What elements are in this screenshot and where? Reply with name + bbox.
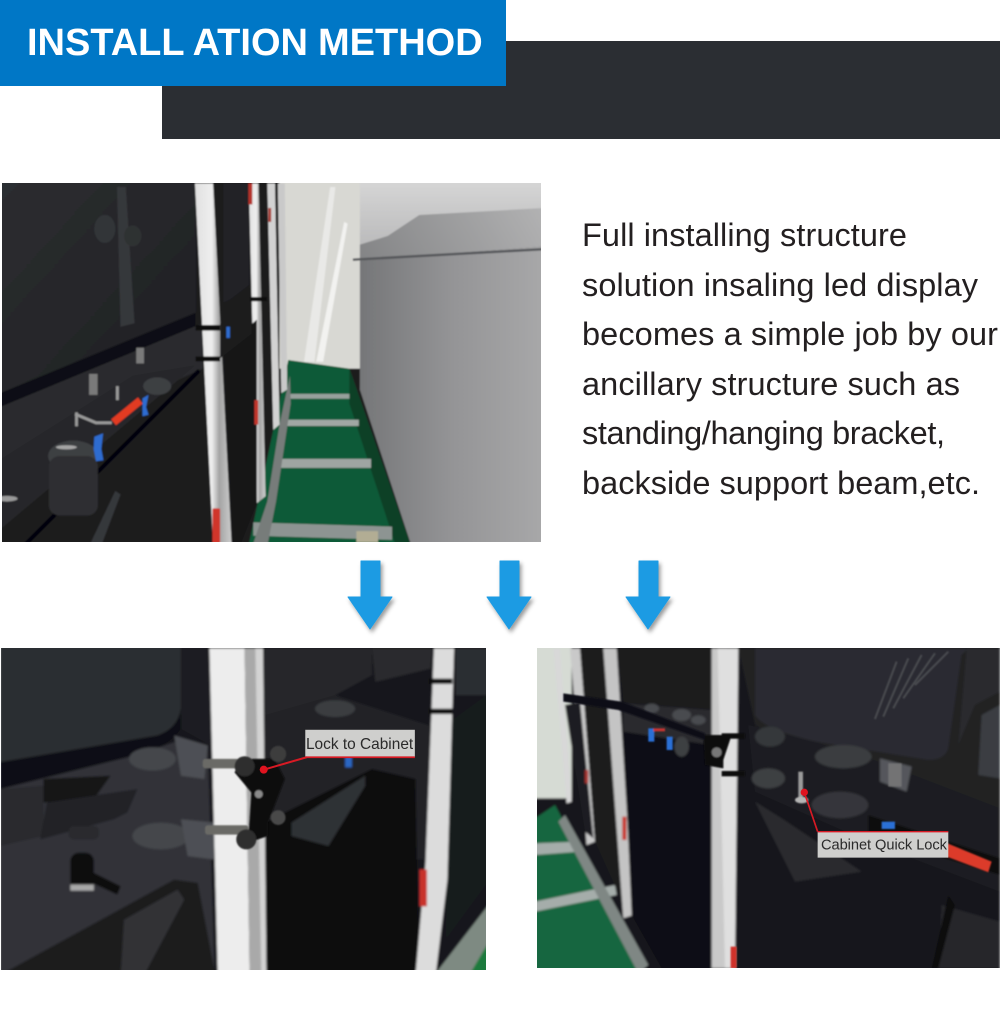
near upright — [712, 648, 735, 968]
title banner: INSTALL ATION METHOD — [27, 22, 483, 64]
photo: cabinet quick lock detail — [537, 648, 1000, 968]
far uprights — [553, 648, 572, 803]
callout: lock to cabinet: Lock to Cabinet — [306, 736, 414, 753]
photo: lock to cabinet detail — [1, 648, 486, 970]
lower left cabinet — [0, 880, 214, 975]
icon: arrow 3 — [626, 561, 670, 629]
mounting plate and bolts — [203, 759, 246, 768]
near upright — [195, 183, 232, 559]
body text block — [582, 217, 998, 501]
vent stripes on top cabinet — [875, 652, 948, 719]
mid body — [0, 742, 214, 975]
title banner — [0, 0, 506, 86]
photo: corridor behind LED cabinets — [2, 183, 541, 542]
far upright — [416, 648, 454, 975]
body text block: standing/hanging bracket, — [582, 415, 945, 451]
upper left cabinet — [0, 645, 181, 762]
right cabinets — [738, 648, 1000, 825]
icon: arrow 1 — [348, 561, 392, 629]
header dark band — [162, 41, 1000, 139]
callout: cabinet quick lock: Cabinet Quick Lock — [821, 838, 948, 854]
icon: arrow 2 — [487, 561, 531, 629]
callout: lock to cabinet — [260, 730, 415, 774]
near cabinets — [0, 180, 196, 393]
body text block: becomes a simple job by our — [582, 316, 998, 352]
body text block: solution insaling led display — [582, 267, 979, 303]
body text block: backside support beam,etc. — [582, 465, 980, 501]
callout: cabinet quick lock — [801, 789, 948, 858]
body text block: ancillary structure such as — [582, 366, 960, 402]
arrows pointing down to detail photos — [348, 560, 674, 634]
right cabinets — [265, 648, 372, 715]
far uprights — [278, 183, 287, 393]
body text block: Full installing structure — [582, 217, 907, 253]
near upright — [209, 648, 250, 975]
